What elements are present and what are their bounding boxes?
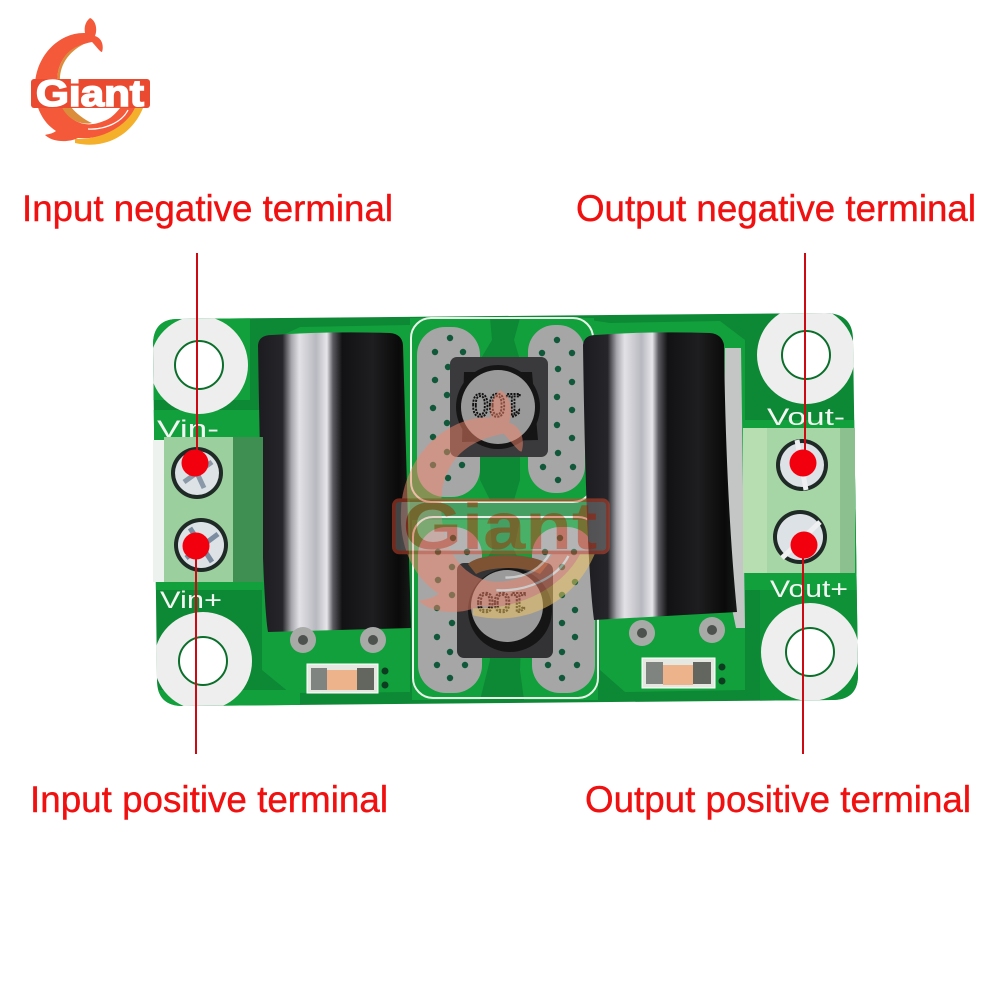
solder pads: inductors (417, 325, 595, 693)
solder pad vias (430, 335, 580, 681)
board labels: Vin+ (160, 587, 222, 614)
inductor: top: 100 (472, 387, 522, 423)
capacitor bracket: right (722, 348, 745, 628)
leader line: output negative (790, 253, 816, 476)
capacitor: left (258, 332, 411, 632)
capacitor legs and SMD parts (290, 617, 726, 693)
mounting holes (150, 306, 859, 710)
board labels: Vout- (767, 404, 845, 431)
leader line: input negative (182, 253, 208, 476)
inductor: top (450, 357, 548, 457)
board labels: Vout+ (770, 576, 848, 603)
board labels: Vin- (157, 416, 219, 443)
center outline: top (411, 318, 593, 502)
terminal block: output (743, 428, 855, 573)
label: output negative terminal: Output negative terminal (576, 188, 976, 229)
logo: Giant (31, 18, 150, 145)
logo: Giant: Giant (36, 73, 144, 114)
PCB board (150, 310, 862, 710)
inductor: bottom: 100 (477, 587, 527, 618)
label: input negative terminal: Input negative terminal (22, 188, 393, 229)
leader line: output positive (790, 532, 818, 754)
inductor: bottom (457, 555, 553, 658)
capacitor: right (583, 332, 737, 620)
watermark logo: Giant (403, 490, 597, 564)
label: output positive terminal: Output positive terminal (585, 779, 971, 820)
board labels (157, 404, 848, 614)
center outline: bottom (413, 517, 598, 698)
label: input positive terminal: Input positive terminal (30, 779, 388, 820)
leader line: input positive (182, 532, 210, 754)
terminal block: input (153, 437, 263, 582)
watermark logo (394, 390, 608, 618)
